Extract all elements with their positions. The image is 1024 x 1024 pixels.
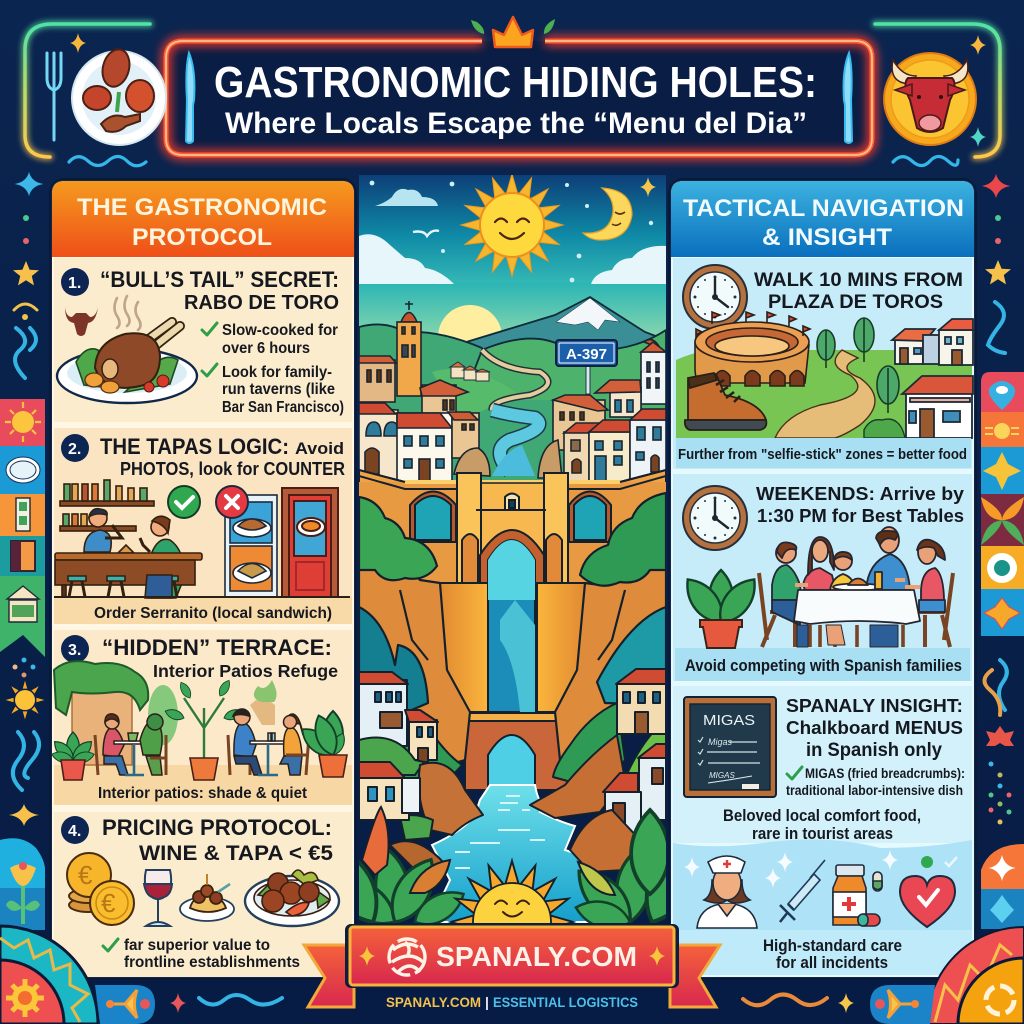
plant pot right [297,711,348,777]
icon: steam [114,296,140,330]
banner: spanaly.com: SPANALY.COM [436,941,637,972]
menu board [225,495,277,597]
lower left houses and rocks [359,672,483,875]
chalkboard: MIGAS [703,712,755,729]
right side ornaments [981,174,1024,929]
panel heading: gastronomic protocol: THE GASTRONOMIC [77,194,327,221]
section 3: hidden terrace: “HIDDEN” TERRACE: [102,635,332,660]
icon: euro coins [67,853,134,925]
section 2: tapas logic: Order Serranito (local sandwich) [94,605,332,622]
panel heading: tactical navigation: TACTICAL NAVIGATION [683,195,964,222]
section: high-standard care: for all incidents [776,954,888,972]
footer tagline: SPANALY.COM [386,995,481,1010]
pale distant sun [438,305,502,341]
title [214,58,817,140]
hiking boot [685,373,766,430]
road and river [482,350,548,476]
icon: fork [47,53,61,140]
panel heading: tactical navigation [671,181,974,257]
houses [892,319,973,438]
bullet text: Slow-cooked for [222,322,338,339]
bullet text: over 6 hours [222,340,310,357]
section: walk 10 mins: WALK 10 MINS FROM [754,269,963,291]
chalkboard: Migas [708,737,733,747]
section 4: pricing protocol: 4. [68,823,81,840]
side ribbon right [981,372,1024,636]
section: weekends: 1:30 PM for Best Tables [757,505,964,526]
bullet text: run taverns (like [222,381,335,398]
section 2: tapas logic [54,428,352,624]
icon: euro coins: € [101,888,116,918]
road sign: A-397 [566,347,607,363]
river [430,785,595,922]
section: weekends: WEEKENDS: Arrive by [756,483,965,504]
moon [583,177,656,240]
icon: meatball plate [245,870,339,926]
section: spanaly insight: MIGAS (fried breadcrumbs): [805,765,965,781]
section 4: pricing protocol: PRICING PROTOCOL: [102,815,332,840]
heart icon [900,856,957,927]
icon: wine glass [144,870,172,926]
corner brackets [25,24,1000,166]
icon: spanaly logo [389,939,425,975]
bottom right corner medallion [927,927,1024,1024]
footer tagline [386,994,638,1010]
section 1: rabo de toro: “BULL’S TAIL” SECRET: [100,267,339,292]
panel: the gastronomic protocol [50,179,356,979]
illustration: Ronda bridge and gorge [359,175,666,923]
icon: tapas plate [72,46,166,145]
chalkboard: MIGAS [709,771,735,780]
section: spanaly insight: Chalkboard MENUS [786,717,963,738]
dome ornament left [0,838,45,930]
section: weekends: Avoid competing with Spanish families [685,656,962,675]
panel: tactical navigation and insight [669,179,976,979]
section 4: pricing protocol: frontline establishments [124,954,300,971]
section 4: pricing protocol: far superior value to [124,937,270,954]
illustration: bar counter [55,480,202,598]
bullet text: Bar San Francisco) [222,399,344,416]
section: walk 10 mins: Further from "selfie-stick" zones = better food [678,446,967,463]
section 2: tapas logic: 2. [68,441,81,458]
footer tagline: | [485,994,489,1010]
smiling half sun [448,858,576,923]
diners right [228,709,309,775]
stars in sky [370,181,653,282]
panel heading: tactical navigation: & INSIGHT [762,224,892,251]
title: Where Locals Escape the “Menu del Dia” [225,107,807,140]
icon: green check [168,486,200,518]
sparkles [684,850,898,888]
section 2: tapas logic: Avoid [295,439,344,458]
plant pot left [50,732,96,780]
distant houses [450,362,490,381]
icon: knife left [186,53,194,143]
bottom ornaments [95,985,935,1024]
plant [678,570,764,648]
diners left [95,714,166,775]
chalkboard [684,697,776,797]
mountains [359,297,666,485]
lower right houses and rocks [530,669,666,872]
header: neon title frame [166,17,872,155]
sun [459,175,565,278]
panel heading: gastronomic protocol [52,181,354,257]
left side ornaments [0,172,52,930]
section: spanaly insight: SPANALY INSIGHT: [786,696,963,716]
bridge [359,470,666,800]
bullring [695,312,810,386]
clouds [375,189,438,206]
icon: tapa [180,874,234,921]
bullet text: Look for family- [222,364,332,381]
trees [817,318,899,413]
icon: knife right [844,53,852,143]
syringe icon [780,860,825,922]
dome ornament right [981,844,1024,929]
section: spanaly insight [673,686,972,843]
left town [359,301,490,485]
section: spanaly insight: rare in tourist areas [752,825,893,843]
foreground leaves [359,805,666,923]
icon: red cross [216,486,248,518]
section: walk 10 mins: PLAZA DE TOROS [768,291,943,313]
medicine bottle icon [833,865,882,926]
section 3: hidden terrace: Interior patios: shade & quiet [98,785,308,802]
road sign [556,340,617,394]
water ripples [455,796,545,868]
panel heading: gastronomic protocol: PROTOCOL [132,224,272,251]
title: GASTRONOMIC HIDING HOLES: [214,58,817,107]
icon: bull head [65,307,98,336]
section: weekends [673,474,972,681]
section 3: hidden terrace: Interior Patios Refuge [153,661,338,681]
door [282,488,338,597]
section: spanaly insight: traditional labor-intensive dish [786,782,963,798]
section: high-standard care: High-standard care [763,937,902,955]
plant pot centre [164,678,244,780]
section 1: rabo de toro: 1. [68,275,81,292]
section 2: tapas logic: PHOTOS, look for COUNTER [120,458,345,479]
section 4: pricing protocol [54,812,352,977]
section: spanaly insight: in Spanish only [806,740,942,761]
bottom left corner medallion [0,926,98,1024]
illustration: patio [50,661,348,780]
icon: crown [471,17,555,47]
section 1: rabo de toro: RABO DE TORO [184,292,339,314]
footer tagline: ESSENTIAL LOGISTICS [493,995,638,1010]
right town [538,340,666,483]
banner: spanaly.com [304,924,720,1007]
illustration: hills and path [676,312,973,438]
section: spanaly insight: Beloved local comfort food, [723,807,921,825]
section 1: rabo de toro [54,258,352,422]
illustration: family at table [759,527,953,647]
section: high-standard care [673,840,972,975]
icon: euro coins: € [78,860,93,890]
icon: bull coin [884,53,976,145]
section 2: tapas logic: THE TAPAS LOGIC: [100,434,289,459]
gorge cliffs [359,493,666,770]
section 3: hidden terrace [50,630,352,805]
bullet checks [202,323,217,376]
nurse icon [697,856,757,928]
section 4: pricing protocol: WINE & TAPA < €5 [139,842,333,865]
bullet text [222,322,344,416]
section: walk 10 mins [673,258,973,469]
section 3: hidden terrace: 3. [68,642,81,659]
side ribbon left [0,399,45,657]
illustration: oxtail dish [57,322,197,403]
